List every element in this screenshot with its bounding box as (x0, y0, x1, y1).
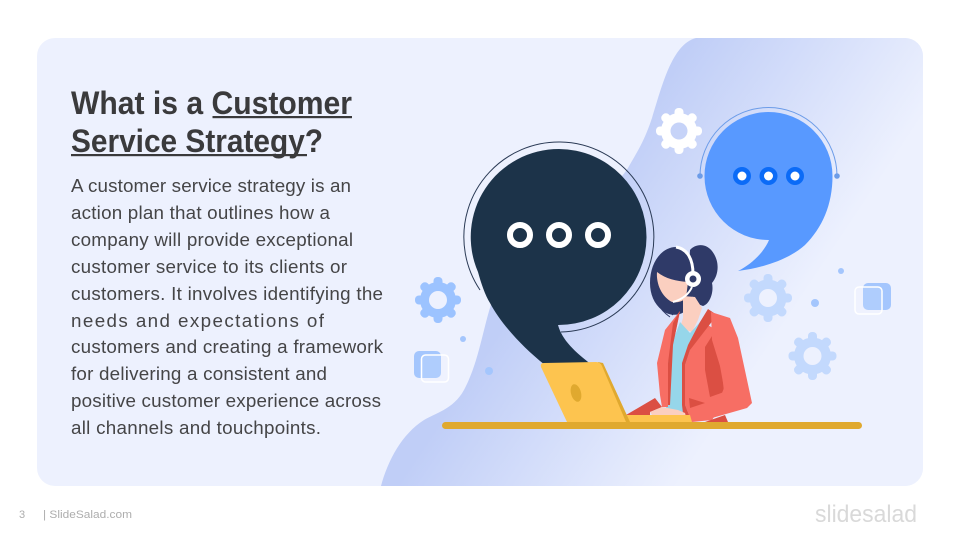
dark speech bubble (464, 142, 654, 365)
body text: customer service to its clients or (71, 256, 347, 277)
body text: customers. It involves identifying the (71, 283, 383, 304)
icon: overlapping squares left (414, 351, 448, 382)
decorative dots (460, 268, 844, 375)
heading: What is a Customer (71, 85, 352, 121)
body text: action plan that outlines how a (71, 202, 331, 223)
body text: company will provide exceptional (71, 229, 353, 250)
body text: customers and creating a framework (71, 336, 384, 357)
icon: pale gear lower right (788, 332, 836, 380)
desk (442, 422, 862, 429)
icon: white gear (656, 108, 702, 154)
blue speech bubble (697, 108, 840, 271)
icon: overlapping squares right (855, 283, 891, 314)
icon: pale gear upper right (744, 274, 792, 322)
body text: A customer service strategy is an (71, 175, 351, 196)
woman with headset (626, 245, 752, 422)
body text: needs and expectations of (71, 310, 325, 331)
heading: Service Strategy? (71, 123, 323, 159)
panel: background card (37, 38, 923, 486)
body text: for delivering a consistent and (71, 363, 327, 384)
background wave shape (381, 38, 923, 486)
body text: all channels and touchpoints. (71, 417, 321, 438)
footer logo wordmark: slidesalad (815, 501, 917, 528)
body text: positive customer experience across (71, 390, 381, 411)
icon: blue gear left (415, 277, 461, 323)
body text (71, 175, 384, 438)
page number: 3 (19, 509, 25, 521)
footer site name: | SlideSalad.com (43, 509, 132, 521)
heading (71, 85, 352, 159)
laptop (541, 362, 692, 422)
